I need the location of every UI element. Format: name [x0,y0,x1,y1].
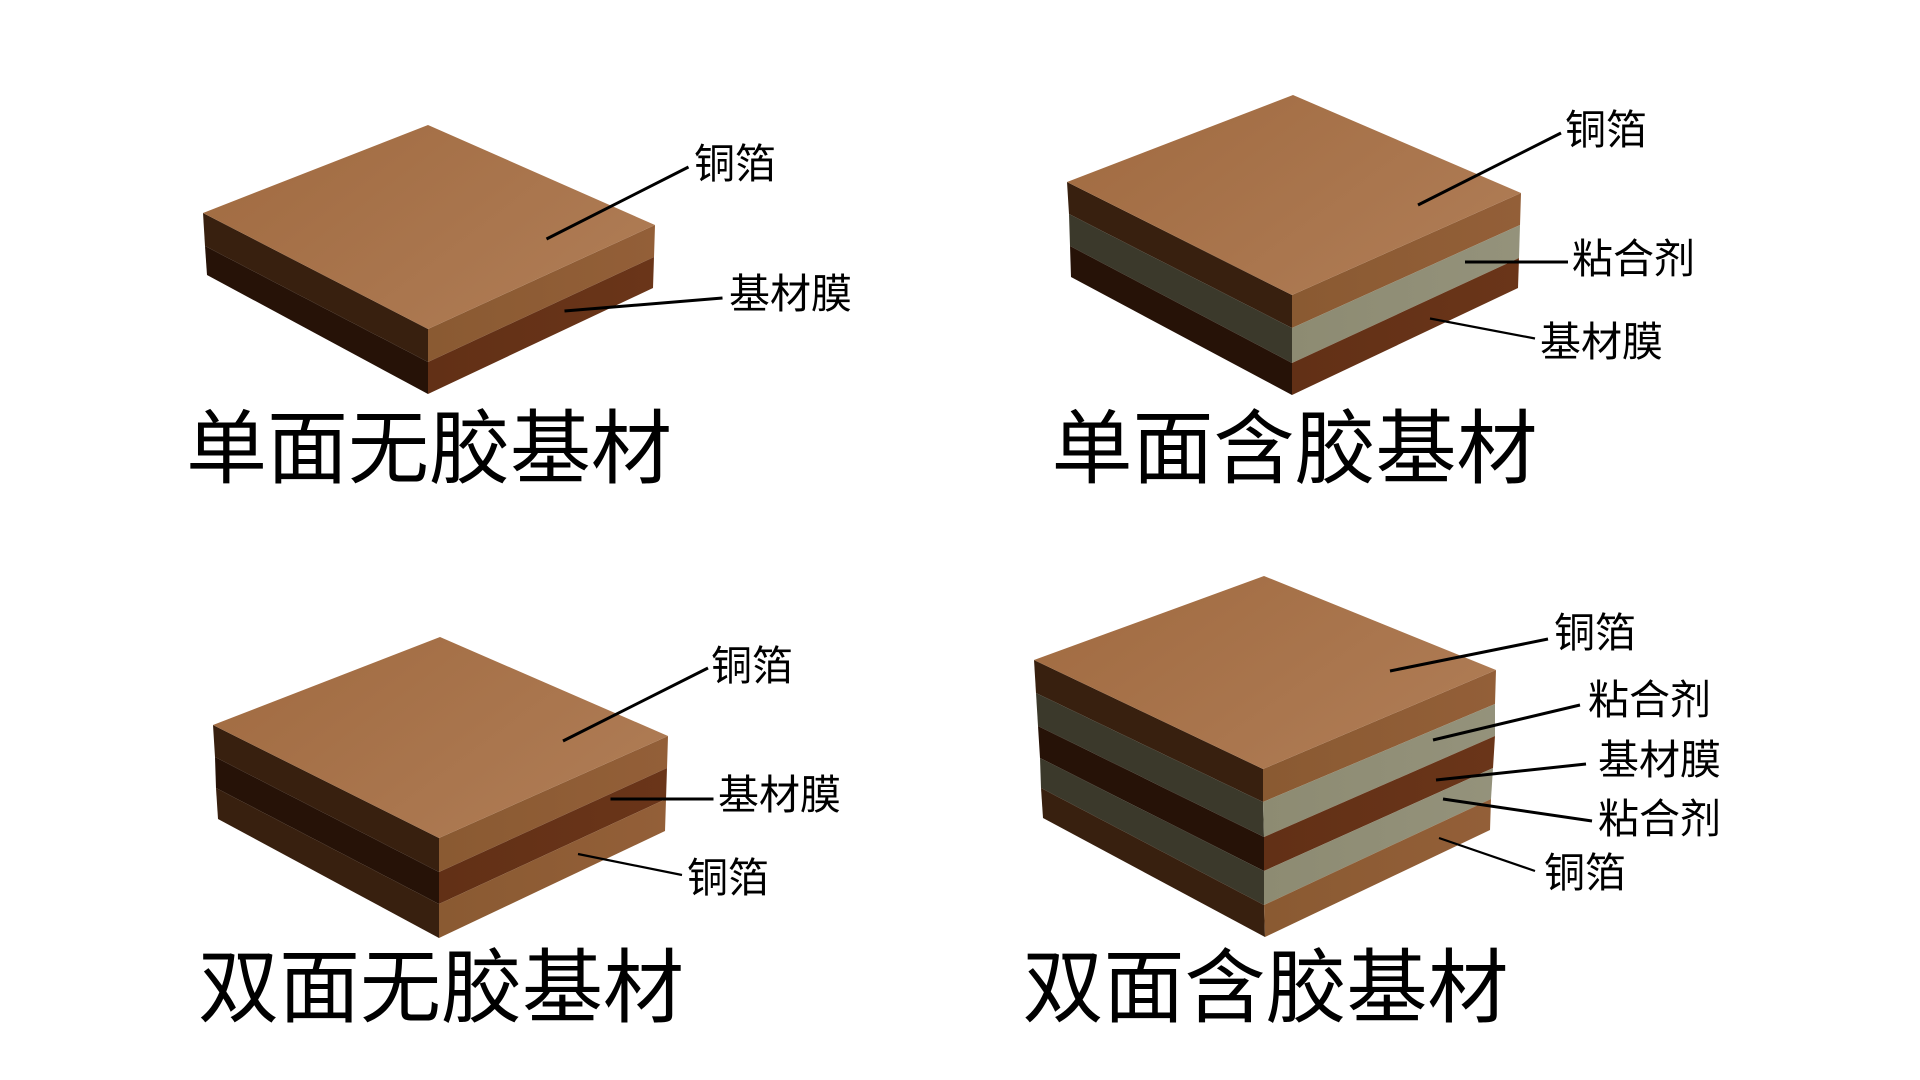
label: copper foil: 铜箔 [1565,107,1647,153]
label: copper foil bottom: 铜箔 [687,855,769,901]
panel: double-sided with adhesive [1022,576,1721,1034]
layered block [1034,576,1496,937]
title: 双面无胶基材 [198,944,684,1034]
title: 单面含胶基材 [1052,405,1538,495]
label: copper foil top [563,643,793,741]
label: copper foil top: 铜箔 [711,643,793,689]
label: base film: 基材膜 [1540,319,1663,365]
label: base film: 基材膜 [729,271,852,317]
label: copper foil [1418,107,1647,205]
panel: single-sided adhesiveless [186,125,852,495]
label: copper foil top: 铜箔 [1554,610,1636,656]
label: base film: 基材膜 [718,772,841,818]
title: 双面含胶基材 [1022,944,1509,1034]
label: adhesive: 粘合剂 [1572,236,1695,282]
label: copper foil [546,141,776,239]
label: adhesive bottom [1443,796,1721,842]
label: adhesive bottom: 粘合剂 [1598,796,1721,842]
label: copper foil: 铜箔 [694,141,776,187]
label: base film [564,271,852,317]
label: copper foil bottom: 铜箔 [1544,850,1626,896]
title: 单面无胶基材 [186,405,672,495]
layered block [1067,95,1521,395]
label: base film [1436,737,1721,783]
label: copper foil bottom [578,854,769,901]
panel: double-sided adhesiveless [198,637,841,1034]
label: adhesive top [1433,677,1711,740]
layered block [203,125,655,394]
panel: single-sided with adhesive [1052,95,1695,495]
label: adhesive top: 粘合剂 [1588,677,1711,723]
layered block [213,637,668,938]
label: copper foil bottom [1439,838,1626,896]
label: base film: 基材膜 [1598,737,1721,783]
label: copper foil top [1390,610,1636,671]
label: base film [1430,318,1663,365]
